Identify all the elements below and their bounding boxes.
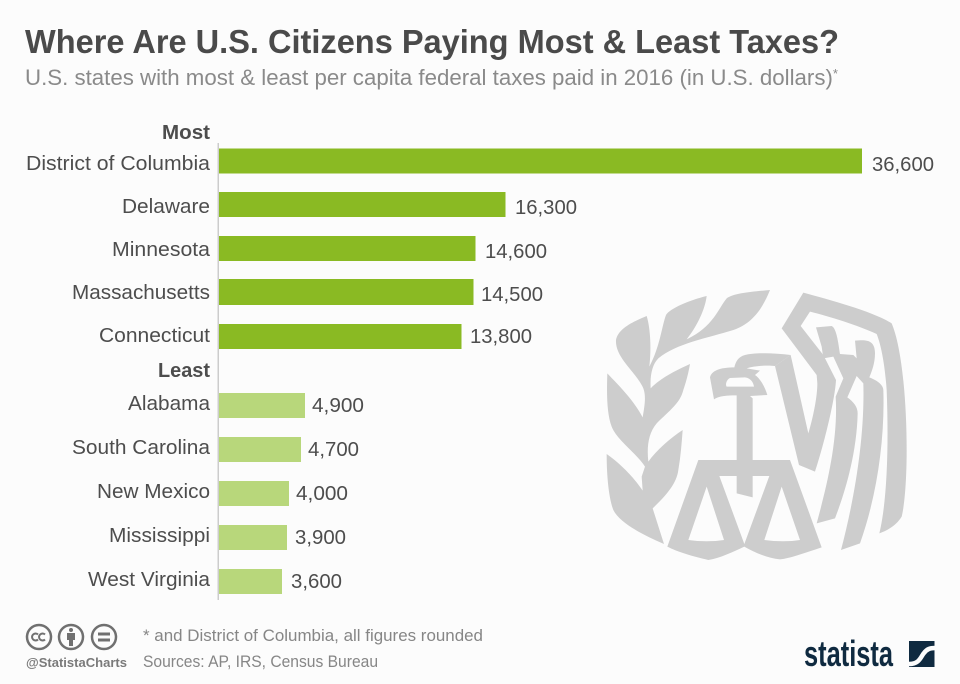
sources: Sources: AP, IRS, Census Bureau: [143, 653, 378, 671]
subtitle: *: [833, 66, 838, 81]
bar row: Connecticut: 13,800: [470, 326, 532, 348]
bar row: South Carolina: South Carolina: [72, 437, 211, 459]
bar row: Minnesota: [112, 236, 547, 263]
bar row: Alabama: 4,900: [312, 395, 364, 417]
bar row: Minnesota: Minnesota: [112, 239, 211, 261]
bar row: District of Columbia: [26, 148, 934, 176]
bar row: Massachusetts: Massachusetts: [72, 282, 210, 304]
icon: IRS eagle and scales logo: [607, 290, 907, 560]
bar row: West Virginia: 3,600: [291, 571, 342, 593]
bar row: Connecticut: [99, 324, 532, 349]
laurel branch: [607, 290, 770, 544]
bar row: District of Columbia: District of Columbia: [26, 153, 211, 175]
scales: [667, 460, 822, 560]
bar row: South Carolina: [72, 437, 359, 462]
bar row: Connecticut: Connecticut: [99, 325, 210, 347]
bar row: New Mexico: New Mexico: [97, 481, 210, 503]
subtitle: U.S. states with most & least per capita federal taxes paid in 2016 (in U.S. dollars): [25, 65, 824, 90]
eagle inner feathers: [816, 326, 884, 550]
bar row: Mississippi: [109, 525, 346, 550]
heading: Most: Most: [162, 122, 210, 144]
bar row: West Virginia: [88, 569, 342, 594]
statista logo: statista: [804, 633, 894, 674]
credit: @StatistaCharts: @StatistaCharts: [26, 655, 127, 670]
bar row: New Mexico: [97, 481, 348, 506]
bar row: New Mexico: 4,000: [296, 483, 348, 505]
bar row: West Virginia: West Virginia: [88, 569, 211, 591]
axis line: [218, 143, 219, 600]
bar row: South Carolina: 4,700: [308, 439, 359, 461]
bar row: Mississippi: 3,900: [295, 527, 346, 549]
bar row: District of Columbia: 36,600: [872, 154, 934, 176]
eagle head and neck: [710, 353, 791, 460]
footnote: * and District of Columbia, all figures rounded: [143, 627, 483, 645]
bar row: Mississippi: Mississippi: [109, 525, 210, 547]
bar row: Delaware: [122, 192, 577, 219]
title: Where Are U.S. Citizens Paying Most & Least Taxes?: [25, 23, 839, 60]
bar row: Alabama: Alabama: [128, 393, 211, 415]
eagle outer wing and V: [775, 293, 907, 533]
bar row: Delaware: Delaware: [122, 196, 210, 218]
heading: Least: Least: [158, 360, 210, 382]
bar row: Minnesota: 14,600: [485, 241, 547, 263]
bar row: Delaware: 16,300: [515, 197, 577, 219]
icon: creative commons licence: [27, 625, 116, 649]
bar row: Massachusetts: [72, 279, 543, 306]
bar row: Alabama: [128, 393, 364, 418]
bar row: Massachusetts: 14,500: [481, 284, 543, 306]
